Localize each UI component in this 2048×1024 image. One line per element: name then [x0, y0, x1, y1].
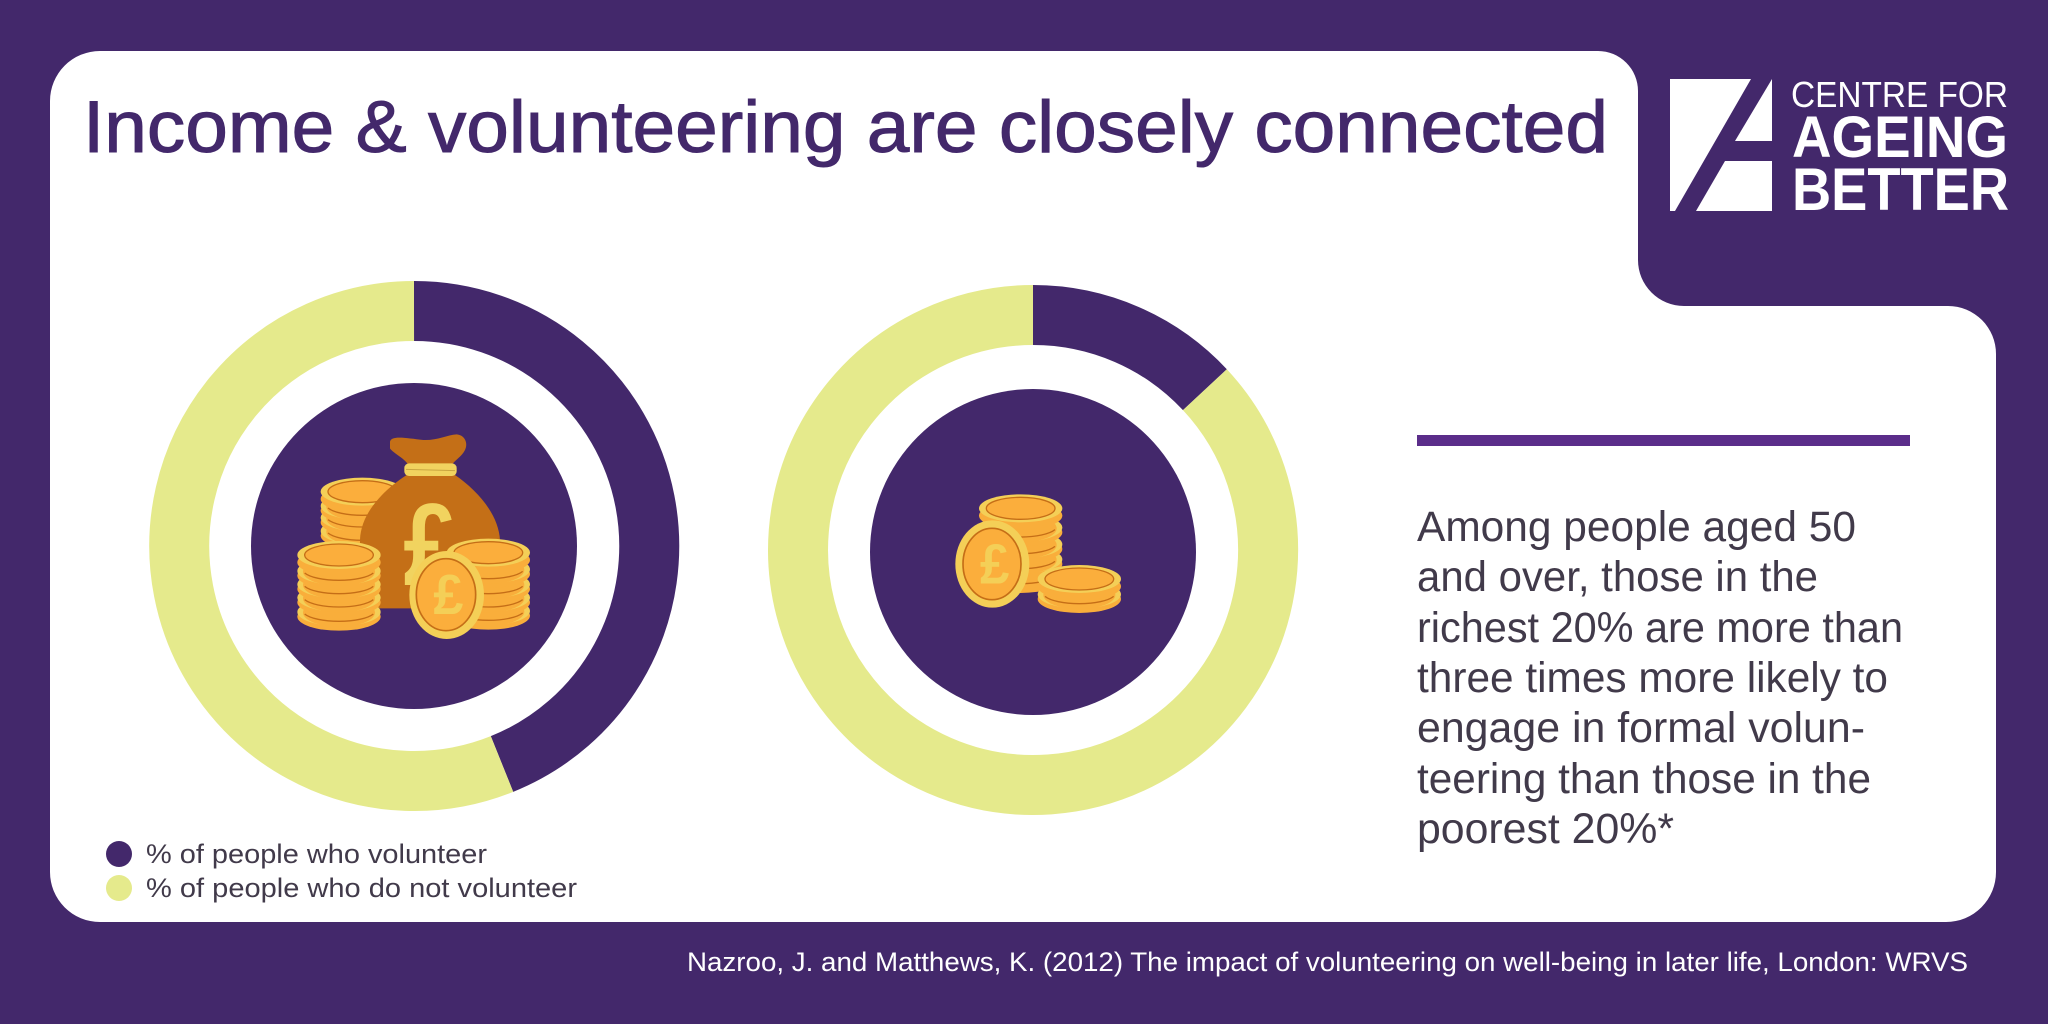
icon: money bag and coins	[297, 434, 530, 639]
body text: Among people aged 50	[1417, 503, 1856, 551]
body text: three times more likely to	[1417, 654, 1888, 702]
logo text: BETTER	[1792, 156, 2009, 223]
icon: coins	[955, 494, 1121, 613]
logo text	[1791, 74, 2009, 223]
logo text: AGEING	[1792, 105, 2008, 170]
citation: Nazroo, J. and Matthews, K. (2012) The impact of volunteering on well-being in later life, London: WRVS	[687, 947, 1968, 977]
logo: Centre for Ageing Better	[1670, 74, 2009, 223]
legend item: do not volunteer: % of people who do not volunteer	[146, 873, 577, 903]
legend item: volunteer: % of people who volunteer	[146, 839, 487, 869]
body text: poorest 20%*	[1417, 805, 1674, 853]
segment: do not volunteer	[798, 315, 1268, 785]
donut chart: richest 20%	[179, 311, 649, 781]
logo text: CENTRE FOR	[1791, 74, 2008, 115]
title: Income & volunteering are closely connected	[83, 87, 1608, 168]
logo mark	[1670, 79, 1772, 211]
body text: richest 20% are more than	[1417, 604, 1903, 652]
centre circle	[870, 389, 1196, 715]
centre circle	[251, 383, 577, 709]
icon: coins: £	[980, 533, 1009, 596]
segment: volunteer	[1033, 315, 1205, 390]
legend	[106, 839, 577, 903]
donut chart: poorest 20%	[798, 315, 1268, 785]
divider bar	[1417, 435, 1910, 446]
body text	[1417, 503, 1903, 853]
icon: money bag and coins: £	[433, 564, 463, 627]
segment: volunteer	[414, 311, 649, 764]
body text: engage in formal volun-	[1417, 704, 1865, 752]
icon: money bag and coins: £	[403, 479, 457, 610]
segment: do not volunteer	[179, 311, 502, 781]
body text: teering than those in the	[1417, 755, 1871, 803]
body text: and over, those in the	[1417, 553, 1818, 601]
